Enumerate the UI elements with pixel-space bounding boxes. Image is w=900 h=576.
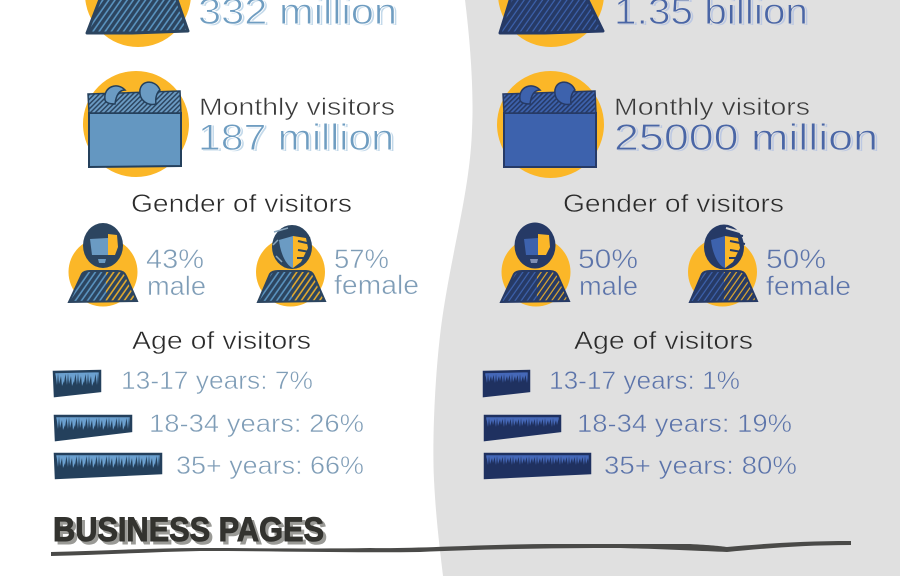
heading: gender of visitors left: Gender of visitors — [131, 190, 352, 218]
stat: monthly visitors left: 187 million — [198, 117, 394, 158]
icon: calendar left — [83, 71, 189, 177]
bar: 35+ left — [55, 454, 161, 478]
icon: female right — [688, 224, 757, 306]
stat: male percentage left: male — [147, 271, 206, 301]
bar: 13-17 right — [484, 371, 529, 396]
stat: female percentage right: female — [766, 271, 851, 301]
icon: calendar right — [497, 71, 604, 178]
label: 13-17 left: 13-17 years: 7% — [121, 367, 313, 395]
panel: left column stats — [54, 0, 419, 480]
icon: total visitors triangle right — [498, 0, 604, 47]
heading: business pages: BUSINESS PAGES — [56, 514, 327, 552]
stat: female percentage right: 50% — [766, 244, 826, 274]
heading: gender of visitors right: Gender of visitors — [563, 190, 784, 218]
label: 35+ left: 35+ years: 66% — [176, 452, 364, 480]
stat: female percentage left: female — [334, 270, 419, 300]
stat: female percentage right — [766, 244, 851, 301]
panel: right column stats — [484, 0, 880, 480]
icon: total visitors triangle left — [85, 0, 191, 47]
icon: male right — [501, 222, 570, 306]
divider: hand-drawn line — [51, 541, 851, 556]
stat: male percentage right: male — [579, 271, 638, 301]
stat: male percentage right — [578, 244, 638, 301]
bar: 13-17 left — [54, 371, 100, 396]
label: 35+ right: 35+ years: 80% — [604, 452, 797, 480]
label: 13-17 right: 13-17 years: 1% — [549, 367, 740, 395]
stat: female percentage left: 57% — [334, 244, 389, 274]
bar: 18-34 right — [485, 416, 560, 440]
stat: monthly visitors right: 25000 million — [614, 117, 878, 158]
stat: monthly visitors right — [614, 94, 880, 159]
stat: female percentage left — [334, 244, 419, 300]
bar: 35+ right — [485, 454, 590, 478]
bar chart: age of visitors left — [54, 367, 364, 480]
stat: monthly visitors right: Monthly visitors — [614, 94, 810, 121]
icon: male left — [68, 223, 138, 306]
heading: age of visitors right: Age of visitors — [574, 327, 753, 355]
stat: male percentage right: 50% — [578, 244, 638, 274]
stat: monthly visitors left: 187 million — [200, 118, 396, 159]
stat: male percentage left: 43% — [146, 244, 204, 274]
bar: 18-34 left — [55, 416, 131, 440]
icon: female left — [256, 225, 325, 306]
stat: male percentage left — [146, 244, 206, 301]
label: 18-34 right: 18-34 years: 19% — [577, 410, 792, 438]
stat: monthly visitors left: Monthly visitors — [199, 94, 395, 121]
stat: monthly visitors right: 25000 million — [616, 118, 880, 159]
heading: age of visitors left: Age of visitors — [132, 327, 311, 355]
heading: business pages: BUSINESS PAGES — [53, 511, 324, 549]
stat: monthly visitors left — [198, 94, 396, 159]
bar chart: age of visitors right — [484, 367, 797, 480]
label: 18-34 left: 18-34 years: 26% — [149, 410, 364, 438]
background: grey right column — [433, 0, 900, 576]
